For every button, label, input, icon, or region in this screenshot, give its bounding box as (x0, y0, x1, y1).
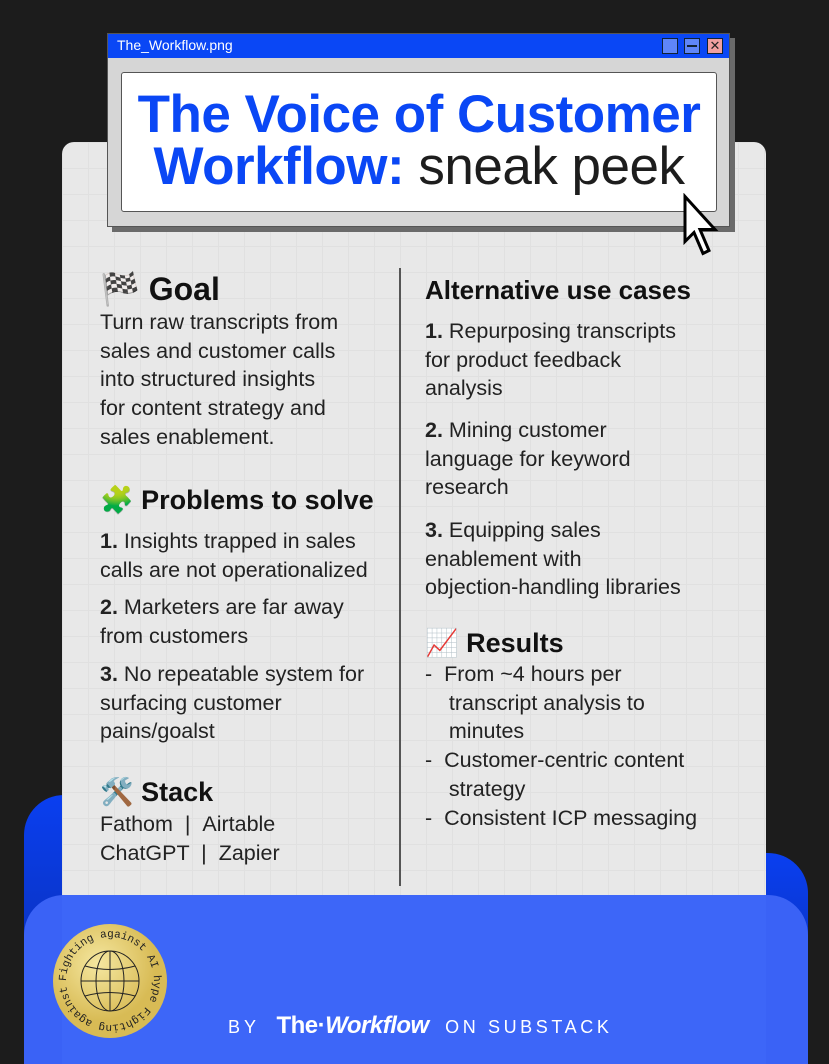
icon: cursor (684, 193, 718, 256)
footer: byline: BY The·Workflow ON SUBSTACK (228, 1012, 612, 1039)
section: stack: 🛠️ Stack (100, 777, 213, 807)
section: alternative use cases: objection-handling libraries (425, 575, 681, 599)
section: goal: 🏁 Goal (100, 271, 220, 307)
section: problems: 2. Marketers are far away (100, 595, 344, 619)
section: results: - Customer-centric content (425, 748, 684, 772)
section: results: - From ~4 hours per (425, 662, 622, 686)
section: problems: 🧩 Problems to solve (100, 485, 374, 515)
section: problems: 1. Insights trapped in sales (100, 529, 356, 553)
section: alternative use cases: Alternative use cases (425, 275, 691, 305)
section: stack (100, 776, 280, 865)
title bar: The_Workflow.png (117, 37, 233, 53)
section: goal (100, 271, 338, 449)
blue back shape right (700, 853, 808, 1064)
heading box: Workflow: sneak peek (154, 137, 684, 196)
title bar: ✕ (710, 38, 720, 53)
section: stack: Fathom | Airtable (100, 812, 275, 836)
paper panel (62, 142, 766, 942)
section: alternative use cases: research (425, 475, 509, 499)
section: stack: ChatGPT | Zapier (100, 841, 280, 865)
title bar (108, 34, 729, 58)
section: goal: sales and customer calls (100, 339, 335, 363)
section: problems: 3. No repeatable system for (100, 662, 364, 686)
section: alternative use cases: 2. Mining customer (425, 418, 607, 442)
section: results (425, 628, 697, 830)
section: goal: sales enablement. (100, 425, 274, 449)
section: goal: Turn raw transcripts from (100, 310, 338, 334)
section: results: - Consistent ICP messaging (425, 806, 697, 830)
section: alternative use cases: for product feedback (425, 348, 621, 372)
footer band (24, 895, 808, 1064)
divider (399, 268, 401, 886)
section: alternative use cases: analysis (425, 376, 503, 400)
window: title (107, 33, 730, 227)
section: results: strategy (449, 777, 525, 801)
section: alternative use cases: language for keyword (425, 447, 631, 471)
heading box (121, 72, 717, 212)
section: problems: pains/goalst (100, 719, 215, 743)
heading box: The Voice of Customer (138, 85, 700, 144)
section: alternative use cases: 1. Repurposing transcripts (425, 319, 676, 343)
section: goal: for content strategy and (100, 396, 326, 420)
section: alternative use cases (425, 275, 691, 599)
section: problems: surfacing customer (100, 691, 282, 715)
section: goal: into structured insights (100, 367, 315, 391)
blue back shape left (24, 795, 144, 1064)
section: problems (100, 484, 374, 743)
section: alternative use cases: 3. Equipping sales (425, 518, 601, 542)
section: results: 📈 Results (425, 628, 564, 658)
section: results: minutes (449, 719, 524, 743)
section: alternative use cases: enablement with (425, 547, 582, 571)
section: problems: from customers (100, 624, 248, 648)
section: problems: calls are not operationalized (100, 558, 368, 582)
section: results: transcript analysis to (449, 691, 645, 715)
